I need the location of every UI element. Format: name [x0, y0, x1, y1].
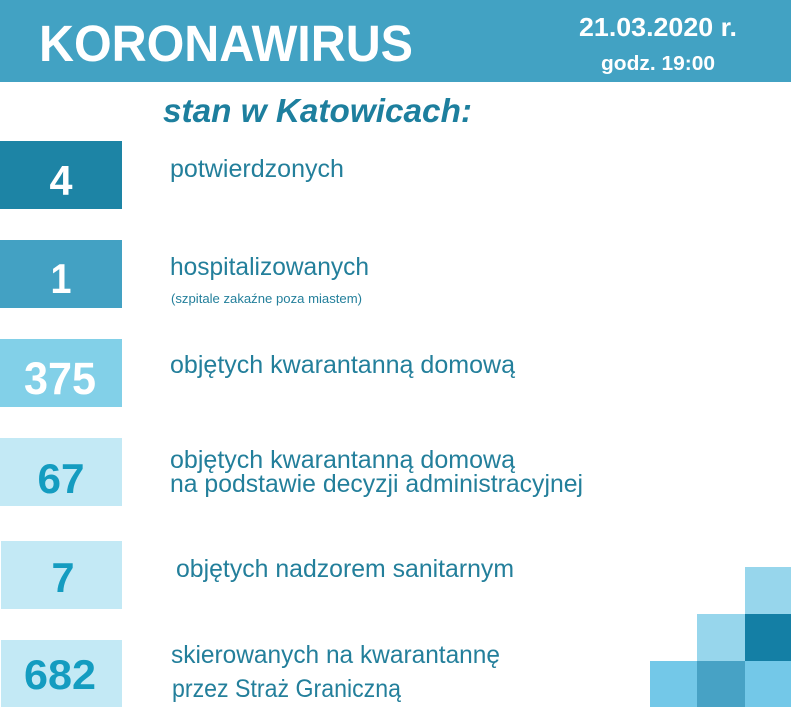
- row: sanitary supervision: [1, 541, 514, 609]
- decorative squares: [650, 567, 791, 707]
- row: administrative quarantine: 67: [38, 455, 84, 502]
- row: administrative quarantine: na podstawie decyzji administracyjnej: [170, 470, 583, 498]
- date: 21.03.2020 r.: [579, 12, 737, 42]
- row: border guard: skierowanych na kwarantannę: [171, 641, 500, 669]
- title: KORONAWIRUS: [39, 15, 413, 72]
- row: confirmed: potwierdzonych: [170, 155, 344, 183]
- row: border guard: 682: [24, 651, 96, 698]
- row: sanitary supervision: objętych nadzorem sanitarnym: [176, 555, 514, 583]
- subtitle: stan w Katowicach:: [163, 92, 472, 129]
- row: home quarantine: objętych kwarantanną domową: [170, 351, 515, 379]
- row: confirmed: [0, 141, 344, 209]
- row: administrative quarantine: [0, 438, 583, 506]
- row: border guard: [1, 640, 500, 707]
- row: confirmed: 4: [50, 157, 73, 204]
- row: home quarantine: [0, 339, 515, 407]
- time: godz. 19:00: [601, 53, 715, 75]
- row: hospitalized: hospitalizowanych: [170, 253, 369, 281]
- row: home quarantine: 375: [24, 353, 96, 404]
- row: hospitalized: [0, 240, 369, 308]
- row: sanitary supervision: 7: [52, 554, 74, 601]
- row: administrative quarantine: objętych kwarantanną domową: [170, 446, 515, 474]
- row: hospitalized: 1: [50, 255, 72, 302]
- header banner: [0, 0, 791, 82]
- row: hospitalized: (szpitale zakaźne poza miastem): [171, 291, 362, 306]
- row: border guard: przez Straż Graniczną: [172, 675, 401, 703]
